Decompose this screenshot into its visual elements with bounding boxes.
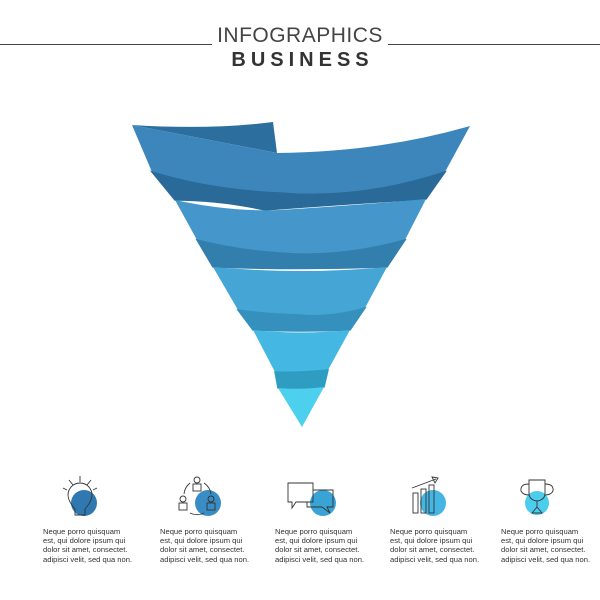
- text block 1: Neque porro quisquam: [43, 527, 120, 536]
- text block 2: [160, 527, 249, 564]
- icon: trophy: [521, 480, 553, 515]
- text block 1: adipisci velit, sed qua non.: [43, 555, 132, 564]
- text block 3: [275, 527, 364, 564]
- text block 1: [43, 527, 132, 564]
- subtitle: BUSINESS: [231, 49, 374, 71]
- text block 3: Neque porro quisquam: [275, 527, 352, 536]
- band 1: [132, 122, 470, 194]
- text block 5: est, qui dolore ipsum qui: [501, 536, 583, 545]
- text block 2: dolor sit amet, consectet.: [160, 545, 244, 554]
- icon: people network: [179, 477, 221, 516]
- text block 4: adipisci velit, sed qua non.: [390, 555, 479, 564]
- text block 2: Neque porro quisquam: [160, 527, 237, 536]
- icon: bar chart growth: [412, 477, 446, 516]
- text block 2: adipisci velit, sed qua non.: [160, 555, 249, 564]
- icon: chat bubbles: [288, 483, 336, 516]
- text block 5: Neque porro quisquam: [501, 527, 578, 536]
- text block 4: est, qui dolore ipsum qui: [390, 536, 472, 545]
- text block 4: dolor sit amet, consectet.: [390, 545, 474, 554]
- band 3: [197, 240, 405, 316]
- text block 4: [390, 527, 479, 564]
- icons row: [62, 476, 554, 516]
- text block 5: [501, 527, 590, 564]
- text block 5: adipisci velit, sed qua non.: [501, 555, 590, 564]
- text block 3: est, qui dolore ipsum qui: [275, 536, 357, 545]
- text block 4: Neque porro quisquam: [390, 527, 467, 536]
- band 2: [152, 172, 445, 254]
- text block 1: est, qui dolore ipsum qui: [43, 536, 125, 545]
- text block 3: dolor sit amet, consectet.: [275, 545, 359, 554]
- text block 2: est, qui dolore ipsum qui: [160, 536, 242, 545]
- icon: lightbulb: [63, 476, 97, 516]
- band 4: [238, 308, 365, 372]
- text block 3: adipisci velit, sed qua non.: [275, 555, 364, 564]
- text block 5: dolor sit amet, consectet.: [501, 545, 585, 554]
- text block 1: dolor sit amet, consectet.: [43, 545, 127, 554]
- title: INFOGRAPHICS: [217, 24, 383, 47]
- band 5 tip: [275, 370, 328, 427]
